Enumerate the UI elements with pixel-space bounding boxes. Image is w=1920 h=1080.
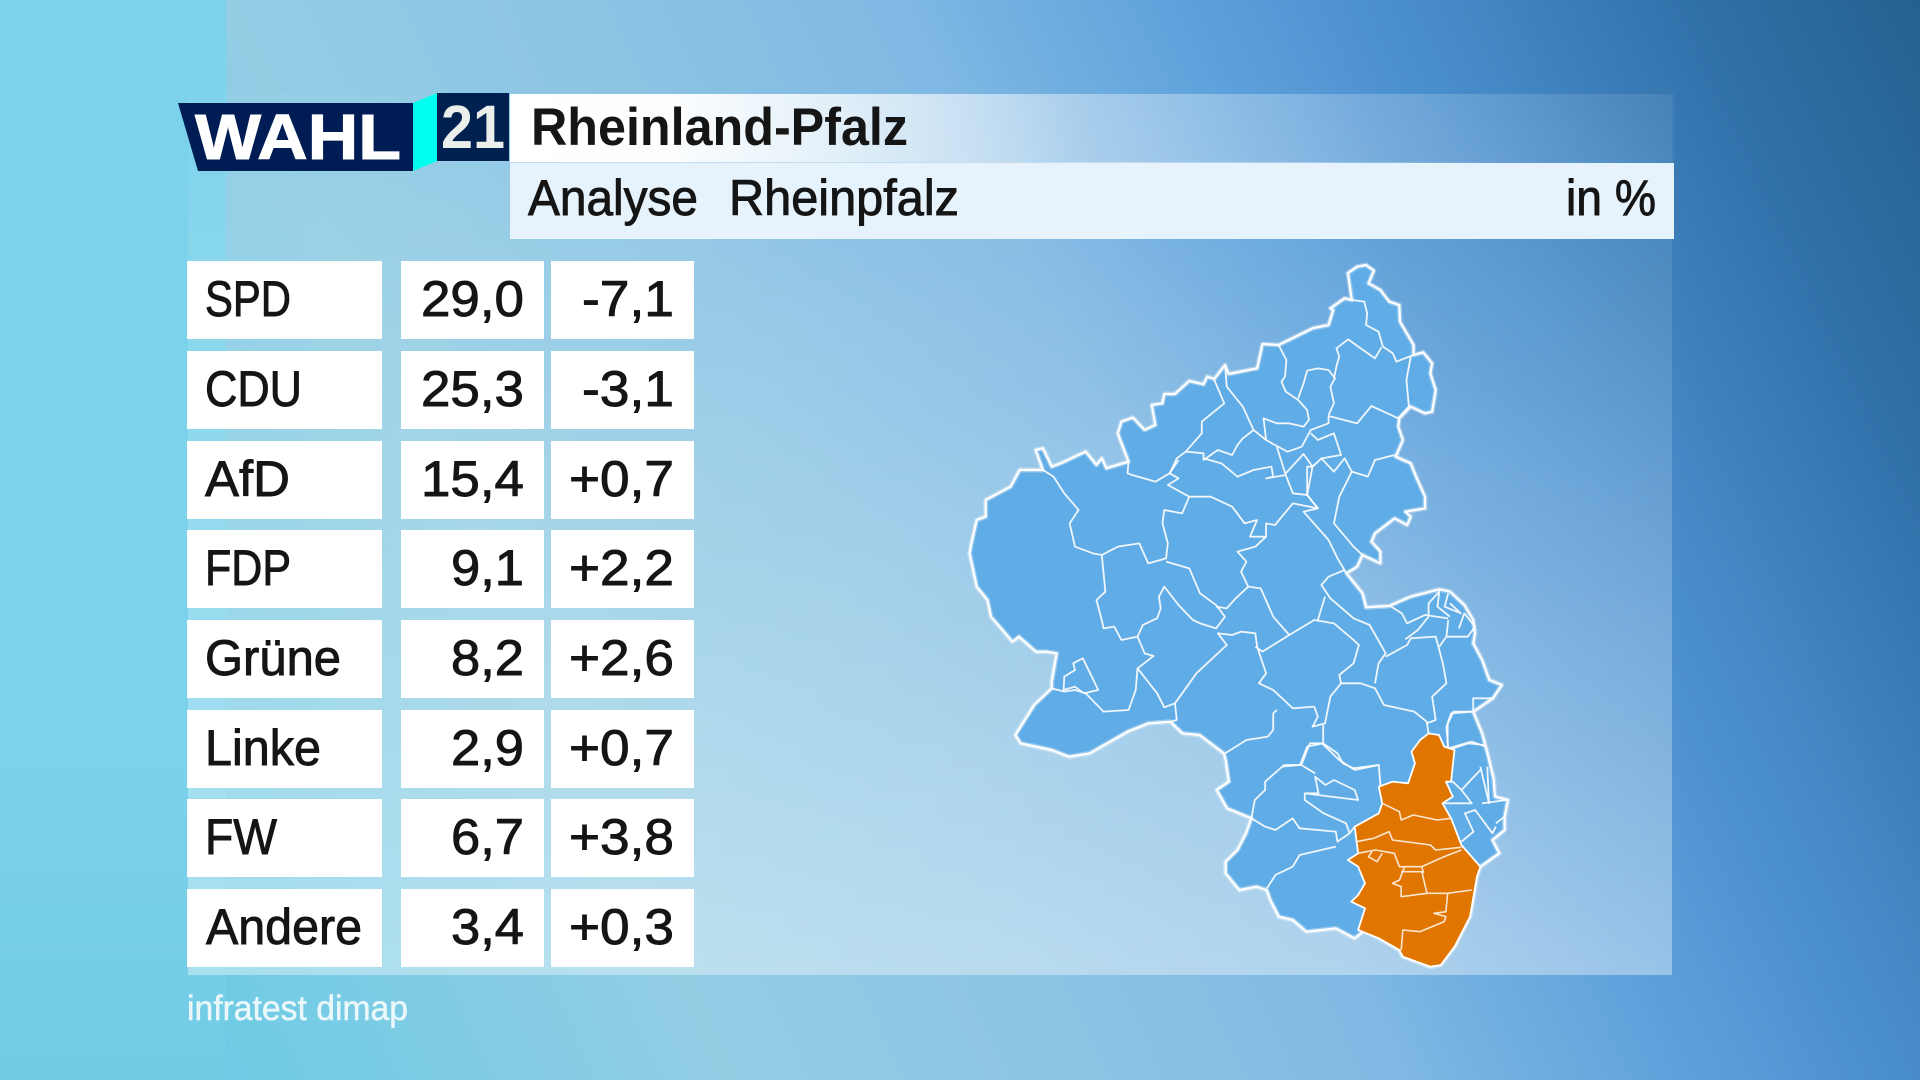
subtitle bar: in %	[1566, 170, 1656, 226]
row: Linke: Linke	[205, 720, 321, 776]
map: district borders south	[1251, 712, 1506, 888]
row: Andere	[187, 889, 694, 967]
map: highlighted Rheinpfalz region	[1348, 733, 1480, 967]
row: SPD: -7,1	[582, 271, 674, 327]
row: SPD: SPD	[205, 271, 291, 327]
row: AfD	[187, 441, 694, 519]
row: FW	[187, 799, 694, 877]
row: CDU: 25,3	[421, 361, 524, 417]
subtitle bar: Rheinpfalz	[729, 170, 959, 226]
results table	[187, 261, 694, 967]
row: Andere: +0,3	[569, 899, 674, 955]
map: state silhouette	[970, 265, 1508, 967]
row: CDU: CDU	[205, 361, 302, 417]
row: SPD: 29,0	[421, 271, 524, 327]
row: Linke	[187, 710, 694, 788]
row: Linke: +0,7	[569, 720, 674, 776]
logo: WAHL 21	[178, 93, 509, 173]
logo: WAHL 21: 21	[441, 93, 505, 161]
row: Grüne	[187, 620, 694, 698]
translucent content panel	[188, 94, 1672, 975]
row: FW: FW	[205, 809, 278, 865]
row: FDP: +2,2	[569, 540, 674, 596]
row: FW: 6,7	[451, 809, 524, 865]
title bar	[510, 94, 1674, 164]
row: Grüne: Grüne	[205, 630, 341, 686]
row: Grüne: 8,2	[451, 630, 524, 686]
row: CDU: -3,1	[582, 361, 674, 417]
subtitle bar	[510, 163, 1674, 239]
row: Andere: Andere	[206, 899, 362, 955]
map of Rheinland-Pfalz	[970, 265, 1508, 967]
left background band	[0, 0, 226, 1080]
row: Andere: 3,4	[451, 899, 524, 955]
subtitle bar: Analyse	[528, 170, 698, 226]
row: Grüne: +2,6	[569, 630, 674, 686]
row: FDP	[187, 530, 694, 608]
row: Linke: 2,9	[451, 720, 524, 776]
row: FDP: FDP	[205, 540, 291, 596]
map: district borders north and centre	[1043, 300, 1493, 768]
title bar: Rheinland-Pfalz	[531, 98, 908, 157]
row: AfD: 15,4	[421, 451, 524, 507]
row: FDP: 9,1	[451, 540, 524, 596]
row: CDU	[187, 351, 694, 429]
row: AfD: AfD	[205, 451, 290, 507]
source note: infratest dimap	[187, 989, 408, 1028]
row: SPD	[187, 261, 694, 339]
row: AfD: +0,7	[569, 451, 674, 507]
logo: WAHL 21: WAHL	[195, 101, 401, 173]
row: FW: +3,8	[569, 809, 674, 865]
